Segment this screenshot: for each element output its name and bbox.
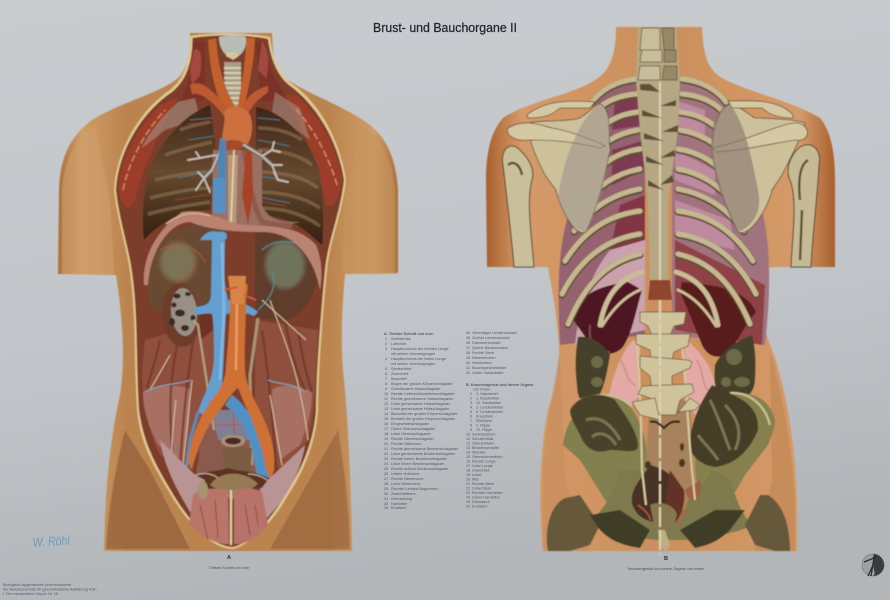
legend column 2: 39 — [466, 356, 470, 360]
legend column 2: 22 — [466, 486, 470, 490]
left scapula and clavicle — [507, 101, 610, 233]
legend column 1: Rechte Nierenschlagader — [391, 437, 435, 441]
title: Brust- und Bauchorgane II — [373, 21, 517, 35]
ribs — [562, 79, 756, 326]
small intestine — [600, 335, 715, 435]
kidney — [160, 282, 214, 430]
legend column 2: Sitzbein — [472, 450, 486, 454]
legend column 1: Speiseröhre — [391, 367, 411, 371]
caption A: Tiefster Schnitt von vorn — [209, 566, 249, 570]
rectum stump — [221, 435, 252, 480]
legend column 1: Linke Nierenschlagader — [391, 432, 432, 436]
pelvis — [547, 393, 790, 551]
legend column 1: Bauchteil der großen Körperschlagader — [391, 412, 458, 416]
legend column 1: 5 — [385, 367, 387, 371]
legend column 1: Linke gemeinsame Halsschlagader — [391, 402, 451, 406]
legend column 1: 11 — [384, 397, 388, 401]
legend column 1: 6 — [385, 372, 387, 376]
legend column 1: Luftröhre — [391, 342, 406, 346]
legend column 2: 38 — [466, 351, 470, 355]
legend column 1: Gemeinsame Halsschlagader — [391, 387, 442, 391]
legend column 2: 9 — [470, 428, 472, 432]
legend column 1: Rechte gemeinsame Halsschlagader — [391, 397, 454, 401]
legend column 2: 11 — [466, 437, 470, 441]
thoracoabdominal opening — [114, 33, 346, 549]
legend column 2: Oberschenkelbein — [472, 455, 503, 459]
legend column 2: 17 — [466, 464, 470, 468]
legend column 2: Linke Niere — [472, 486, 491, 490]
legend column 1: Bauchfell — [391, 377, 407, 381]
legend column 2: 42 — [466, 371, 470, 375]
legend column 1: Rechte Hüftvenen — [391, 442, 421, 446]
legend column 2 — [466, 331, 534, 508]
rectum — [632, 465, 688, 553]
diaphragm — [144, 211, 321, 290]
legend column 1: 14 — [384, 412, 388, 416]
legend column 2: 2 — [470, 396, 472, 400]
legend column 2: Bauchspeicheldrüse — [472, 366, 506, 370]
legend column 1: 31 — [384, 497, 388, 501]
right scapula and clavicle — [711, 101, 807, 233]
aortic arch and carotids — [190, 38, 268, 150]
legend column 1: 12 — [384, 402, 388, 406]
legend column 1: Rechte Unterschlüsselbeinschlagader — [391, 392, 455, 396]
legend column 1: 8 — [385, 382, 387, 386]
legend column 2: Rechte Niere — [472, 482, 494, 486]
legend column 1: 15 — [384, 417, 388, 421]
caption B: Knochengerüst und innere Organe von hinten — [628, 567, 704, 571]
legend column 1: Bogen der großen Körperschlagader — [391, 382, 453, 386]
legend column 2: Rechter Harnleiter — [472, 491, 504, 495]
ureters — [637, 345, 695, 505]
publisher note: I. Der menschliche Körper Nr. 19 — [3, 592, 58, 596]
legend column 2: Oberarmbein — [472, 442, 494, 446]
legend column 1: Enddarm — [391, 506, 406, 510]
legend column 2: 26 — [466, 504, 470, 508]
legend column 1: Obere Gekröseschlagader — [391, 427, 436, 431]
legend column 1: 2 — [385, 342, 387, 346]
ureter right — [250, 318, 258, 465]
legend column 2: Beckenschaufel — [472, 446, 499, 450]
legend column 1: 1 — [385, 337, 387, 341]
legend column 1: Linke gemeinsame Hüftschlagader — [391, 407, 450, 411]
legend column 2: Steißbein — [476, 419, 492, 423]
figure A: anterior torso — [58, 33, 398, 551]
legend column 1: Hauptbronchus der linken Lunge — [391, 357, 446, 361]
legend column 2: 1. Rippe — [476, 424, 490, 428]
figure label B: B — [664, 556, 668, 562]
legend column 2: 1. Brustwirbel — [476, 396, 499, 400]
legend column 1: 4 — [385, 357, 387, 361]
legend column 2: 24 — [466, 496, 470, 500]
legend column 1: Rechter Lenden-Magennerv — [391, 487, 438, 491]
legend column 1: Untere Hohlvene — [391, 472, 420, 476]
legend column 1: 18 — [384, 432, 388, 436]
figure label A: A — [227, 555, 231, 561]
legend column 2: Schulterblatt — [472, 437, 494, 441]
legend column 2: 25 — [466, 500, 470, 504]
legend column 2: 5 — [470, 410, 472, 414]
legend column 1: 27 — [384, 477, 388, 481]
abdominal back wall muscles — [142, 320, 215, 470]
kidneys — [572, 282, 756, 357]
legend column 1: 9 — [385, 387, 387, 391]
legend column 2: Schlüsselbein — [472, 432, 495, 436]
liver and spleen area — [147, 224, 225, 315]
legend column 1: 22 — [384, 452, 388, 456]
legend column 2: 19 — [466, 473, 470, 477]
legend column 1: 7 — [385, 377, 387, 381]
legend column 2: 23 — [466, 491, 470, 495]
legend column 2: 40 — [466, 361, 470, 365]
legend column 1: Brustteil der großen Körperschlagader — [391, 417, 456, 421]
legend column 1: 3 — [385, 347, 387, 351]
legend column 2: 12 — [466, 442, 470, 446]
legend column 2: 8 — [470, 424, 472, 428]
legend column 2: 36 — [466, 341, 470, 345]
legend column 1: Hauptbronchus der rechten Lunge — [391, 347, 449, 351]
legend column 1: Rechte innere Beckenschlagader — [391, 457, 448, 461]
legend column 1: mit seinen Verzweigungen — [391, 362, 435, 366]
legend column 2: Nebenniere — [472, 361, 492, 365]
hip joints — [547, 495, 790, 551]
legend column 1: Rechte Nierenvene — [391, 477, 424, 481]
legend column 1: 21 — [384, 447, 388, 451]
legend column 2: Nierenbecken — [472, 356, 495, 360]
legend column 2: Linker Samenleiter — [472, 371, 504, 375]
legend column 1: 17 — [384, 427, 388, 431]
legend column 2: 15 — [466, 455, 470, 459]
legend column 2: 12. Rippe — [476, 428, 492, 432]
legend column 2: 1. Lendenwirbel — [476, 406, 503, 410]
trachea — [219, 36, 246, 115]
legend column 2: Dünndarm — [472, 500, 490, 504]
legend column 2: 13 — [466, 446, 470, 450]
legend column 1: 16 — [384, 422, 388, 426]
legend column 2: 16 — [466, 460, 470, 464]
legend column 2: 7 — [470, 419, 472, 423]
legend column 2: 34 — [466, 331, 470, 335]
signature: W. Röhl — [32, 532, 71, 550]
legend column 2: 14 — [466, 450, 470, 454]
legend column 1: Linke Nierenvene — [391, 482, 421, 486]
legend column 2: Querer Bauchmuskel — [472, 346, 508, 350]
legend column 2: 37 — [466, 346, 470, 350]
legend column 1: mit seinen Verzweigungen — [391, 352, 435, 356]
legend column 2: 5. Lendenwirbel — [476, 410, 503, 414]
bladder and pelvic floor — [160, 440, 305, 545]
legend column 2: Viereckiger Lendenmuskel — [472, 331, 517, 335]
legend column 2: Rechte Niere — [472, 351, 494, 355]
legend column 2: 10 — [466, 432, 470, 436]
lungs and organs behind ribs — [559, 82, 769, 345]
inferior vena cava — [186, 138, 272, 500]
legend column 1: 26 — [384, 472, 388, 476]
legend column 2: Linke Lunge — [472, 464, 493, 468]
legend column 1: 32 — [384, 502, 388, 506]
publisher note: Biologisch-hygienisches Unterrichtswerk — [3, 583, 71, 587]
legend column 2: Linker Harnleiter — [472, 496, 501, 500]
legend column 2: Kreuzbein — [476, 414, 493, 418]
legend column 2: Milz — [472, 478, 479, 482]
legend column 2: Enddarm — [472, 504, 487, 508]
legend column 2: 4 — [470, 406, 472, 410]
legend column 2: 41 — [466, 366, 470, 370]
legend column 1: 24 — [384, 462, 388, 466]
legend column 1: Harnleiter — [391, 502, 408, 506]
legend column 2: 3 — [470, 401, 472, 405]
legend column 1: 10 — [384, 392, 388, 396]
right lung — [256, 107, 323, 245]
bronchial tree — [188, 142, 288, 192]
legend column 1: Linke innere Beckenschlagader — [391, 462, 445, 466]
legend column 1: 25 — [384, 467, 388, 471]
legend column 1: Linke gemeinsame Beckenschlagader — [391, 452, 456, 456]
legend column 2: 1 — [470, 392, 472, 396]
psoas tissue and pelvic cavity — [195, 420, 268, 480]
publisher logo — [862, 554, 884, 576]
legend column 1: 28 — [384, 482, 388, 486]
legend column 1: 19 — [384, 437, 388, 441]
sigmoid and descending loops — [570, 385, 758, 467]
legend column 2: 1. Halswirbel — [476, 392, 498, 396]
abdominal aorta and iliac arteries — [188, 276, 274, 480]
left lung — [143, 105, 216, 240]
legend column 1: 23 — [384, 457, 388, 461]
legend column 2: Großer Lendenmuskel — [472, 336, 510, 340]
legend column 1: Eingeweideschlagader — [391, 422, 430, 426]
legend column 2: 35 — [466, 336, 470, 340]
legend column 2: 12. Brustwirbel — [476, 401, 501, 405]
publisher note: der Bundeszentrale für gesundheitliche Aufklärung Köln — [3, 588, 97, 592]
humeri — [502, 145, 820, 267]
ascending and descending colon — [576, 335, 756, 404]
legend column 1: Zwerchfellnerv — [391, 492, 416, 496]
legend column 2: Zwerchfell — [472, 468, 489, 472]
publisher note — [3, 583, 97, 596]
legend column 2: 18 — [466, 468, 470, 472]
legend column 1: Schilddrüse — [391, 337, 411, 341]
legend column 2: Rechte Lunge — [472, 460, 496, 464]
legend column 1: Grenzstrang — [391, 497, 412, 501]
legend column 2: Darmbeinmuskel — [472, 341, 501, 345]
legend column 1: Rechte äußere Beckenschlagader — [391, 467, 449, 471]
legend column 1: A. Tiefster Schnitt von vorn — [384, 332, 434, 336]
legend column 1: 29 — [384, 487, 388, 491]
legend column 1: Zwerchfell — [391, 372, 408, 376]
legend column 2: 6 — [470, 414, 472, 418]
legend column 2: Leber — [472, 473, 482, 477]
spine — [632, 27, 700, 555]
legend column 1: Rechte gemeinsame Beckenschlagader — [391, 447, 459, 451]
legend column 2: 20 — [466, 478, 470, 482]
figure B: posterior torso — [486, 27, 835, 555]
mediastinum — [212, 150, 300, 232]
legend column 1: 13 — [384, 407, 388, 411]
legend column 2: von hinten — [473, 388, 491, 392]
legend column 2: 21 — [466, 482, 470, 486]
legend column 1: 20 — [384, 442, 388, 446]
legend column 1: 30 — [384, 492, 388, 496]
legend column 1 — [384, 332, 459, 510]
legend column 1: 33 — [384, 506, 388, 510]
legend column 2: B. Knochengerüst und innere Organe — [466, 383, 534, 387]
